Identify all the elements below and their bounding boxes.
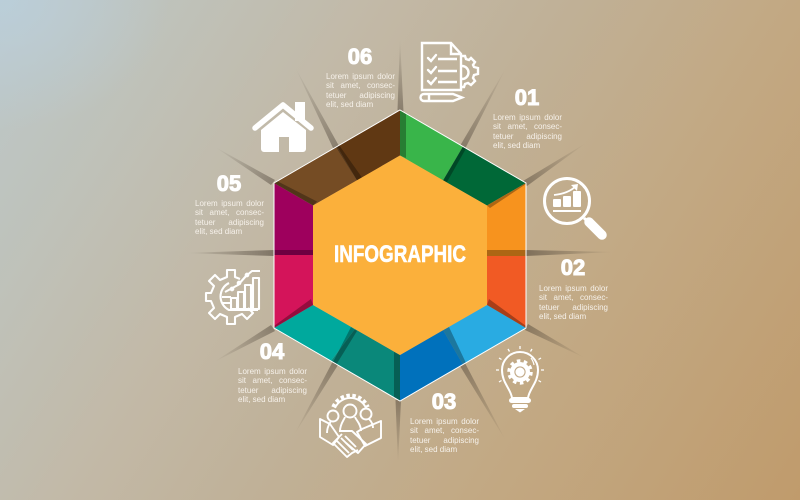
segment: orange [487, 183, 526, 256]
segment: teal [274, 305, 355, 361]
icon: gear with bar chart [206, 270, 260, 324]
text block 04 [238, 367, 307, 404]
hexagon outline [274, 110, 526, 401]
icon: house [255, 102, 311, 152]
number 02: 02 [561, 255, 585, 280]
icon: checklist with gear [420, 43, 478, 101]
number 03: 03 [432, 389, 456, 414]
text block 03: sit amet, consec- [410, 426, 479, 435]
text block 03: Lorem ipsum dolor [410, 417, 479, 426]
shadow rays [185, 38, 614, 465]
text block 05: tetuer adipiscing [195, 218, 264, 227]
text block 01: Lorem ipsum dolor [493, 113, 562, 122]
segment shadow bands [274, 110, 526, 401]
segment: light blue [443, 305, 526, 364]
text block 06: elit, sed diam [326, 100, 373, 109]
text block 03: tetuer adipiscing [410, 436, 479, 445]
text block 02: tetuer adipiscing [539, 303, 608, 312]
segment: crimson [274, 255, 313, 328]
text block 02: sit amet, consec- [539, 293, 608, 302]
segment: dark green [443, 146, 526, 206]
number 04: 04 [260, 339, 285, 364]
text block 04: sit amet, consec- [238, 376, 307, 385]
text block 05 [195, 199, 264, 236]
hexagon segments [274, 110, 526, 401]
text block 06: tetuer adipiscing [326, 91, 395, 100]
text block 05: Lorem ipsum dolor [195, 199, 264, 208]
icon: light bulb with gear [496, 346, 544, 412]
text block 02: Lorem ipsum dolor [539, 284, 608, 293]
center hexagon [313, 156, 487, 355]
text block 02: elit, sed diam [539, 312, 586, 321]
text block 01: tetuer adipiscing [493, 132, 562, 141]
text block 05: sit amet, consec- [195, 208, 264, 217]
numbers [217, 44, 585, 414]
icon: magnifier with chart [544, 178, 602, 235]
segment: magenta [274, 183, 313, 255]
text block 04: Lorem ipsum dolor [238, 367, 307, 376]
number 06: 06 [348, 44, 372, 69]
segment: dark teal [331, 329, 400, 401]
text block 06 [326, 72, 395, 109]
number 05: 05 [217, 171, 241, 196]
segment: red orange [487, 256, 526, 328]
text block 04: elit, sed diam [238, 395, 285, 404]
title: INFOGRAPHIC [334, 241, 466, 268]
text block 01: elit, sed diam [493, 141, 540, 150]
text block 06: Lorem ipsum dolor [326, 72, 395, 81]
icon: handshake and team [320, 395, 381, 457]
text block 01: sit amet, consec- [493, 122, 562, 131]
segment: blue [400, 330, 463, 401]
text block 05: elit, sed diam [195, 227, 242, 236]
segment: light brown [274, 146, 357, 206]
text block 01 [493, 113, 562, 150]
segment: dark brown [337, 110, 400, 180]
text block 02 [539, 284, 608, 321]
text block 03 [410, 417, 479, 454]
text block 03: elit, sed diam [410, 445, 457, 454]
segment: green [400, 110, 463, 180]
text block 06: sit amet, consec- [326, 81, 395, 90]
number 01: 01 [515, 85, 539, 110]
text block 04: tetuer adipiscing [238, 386, 307, 395]
